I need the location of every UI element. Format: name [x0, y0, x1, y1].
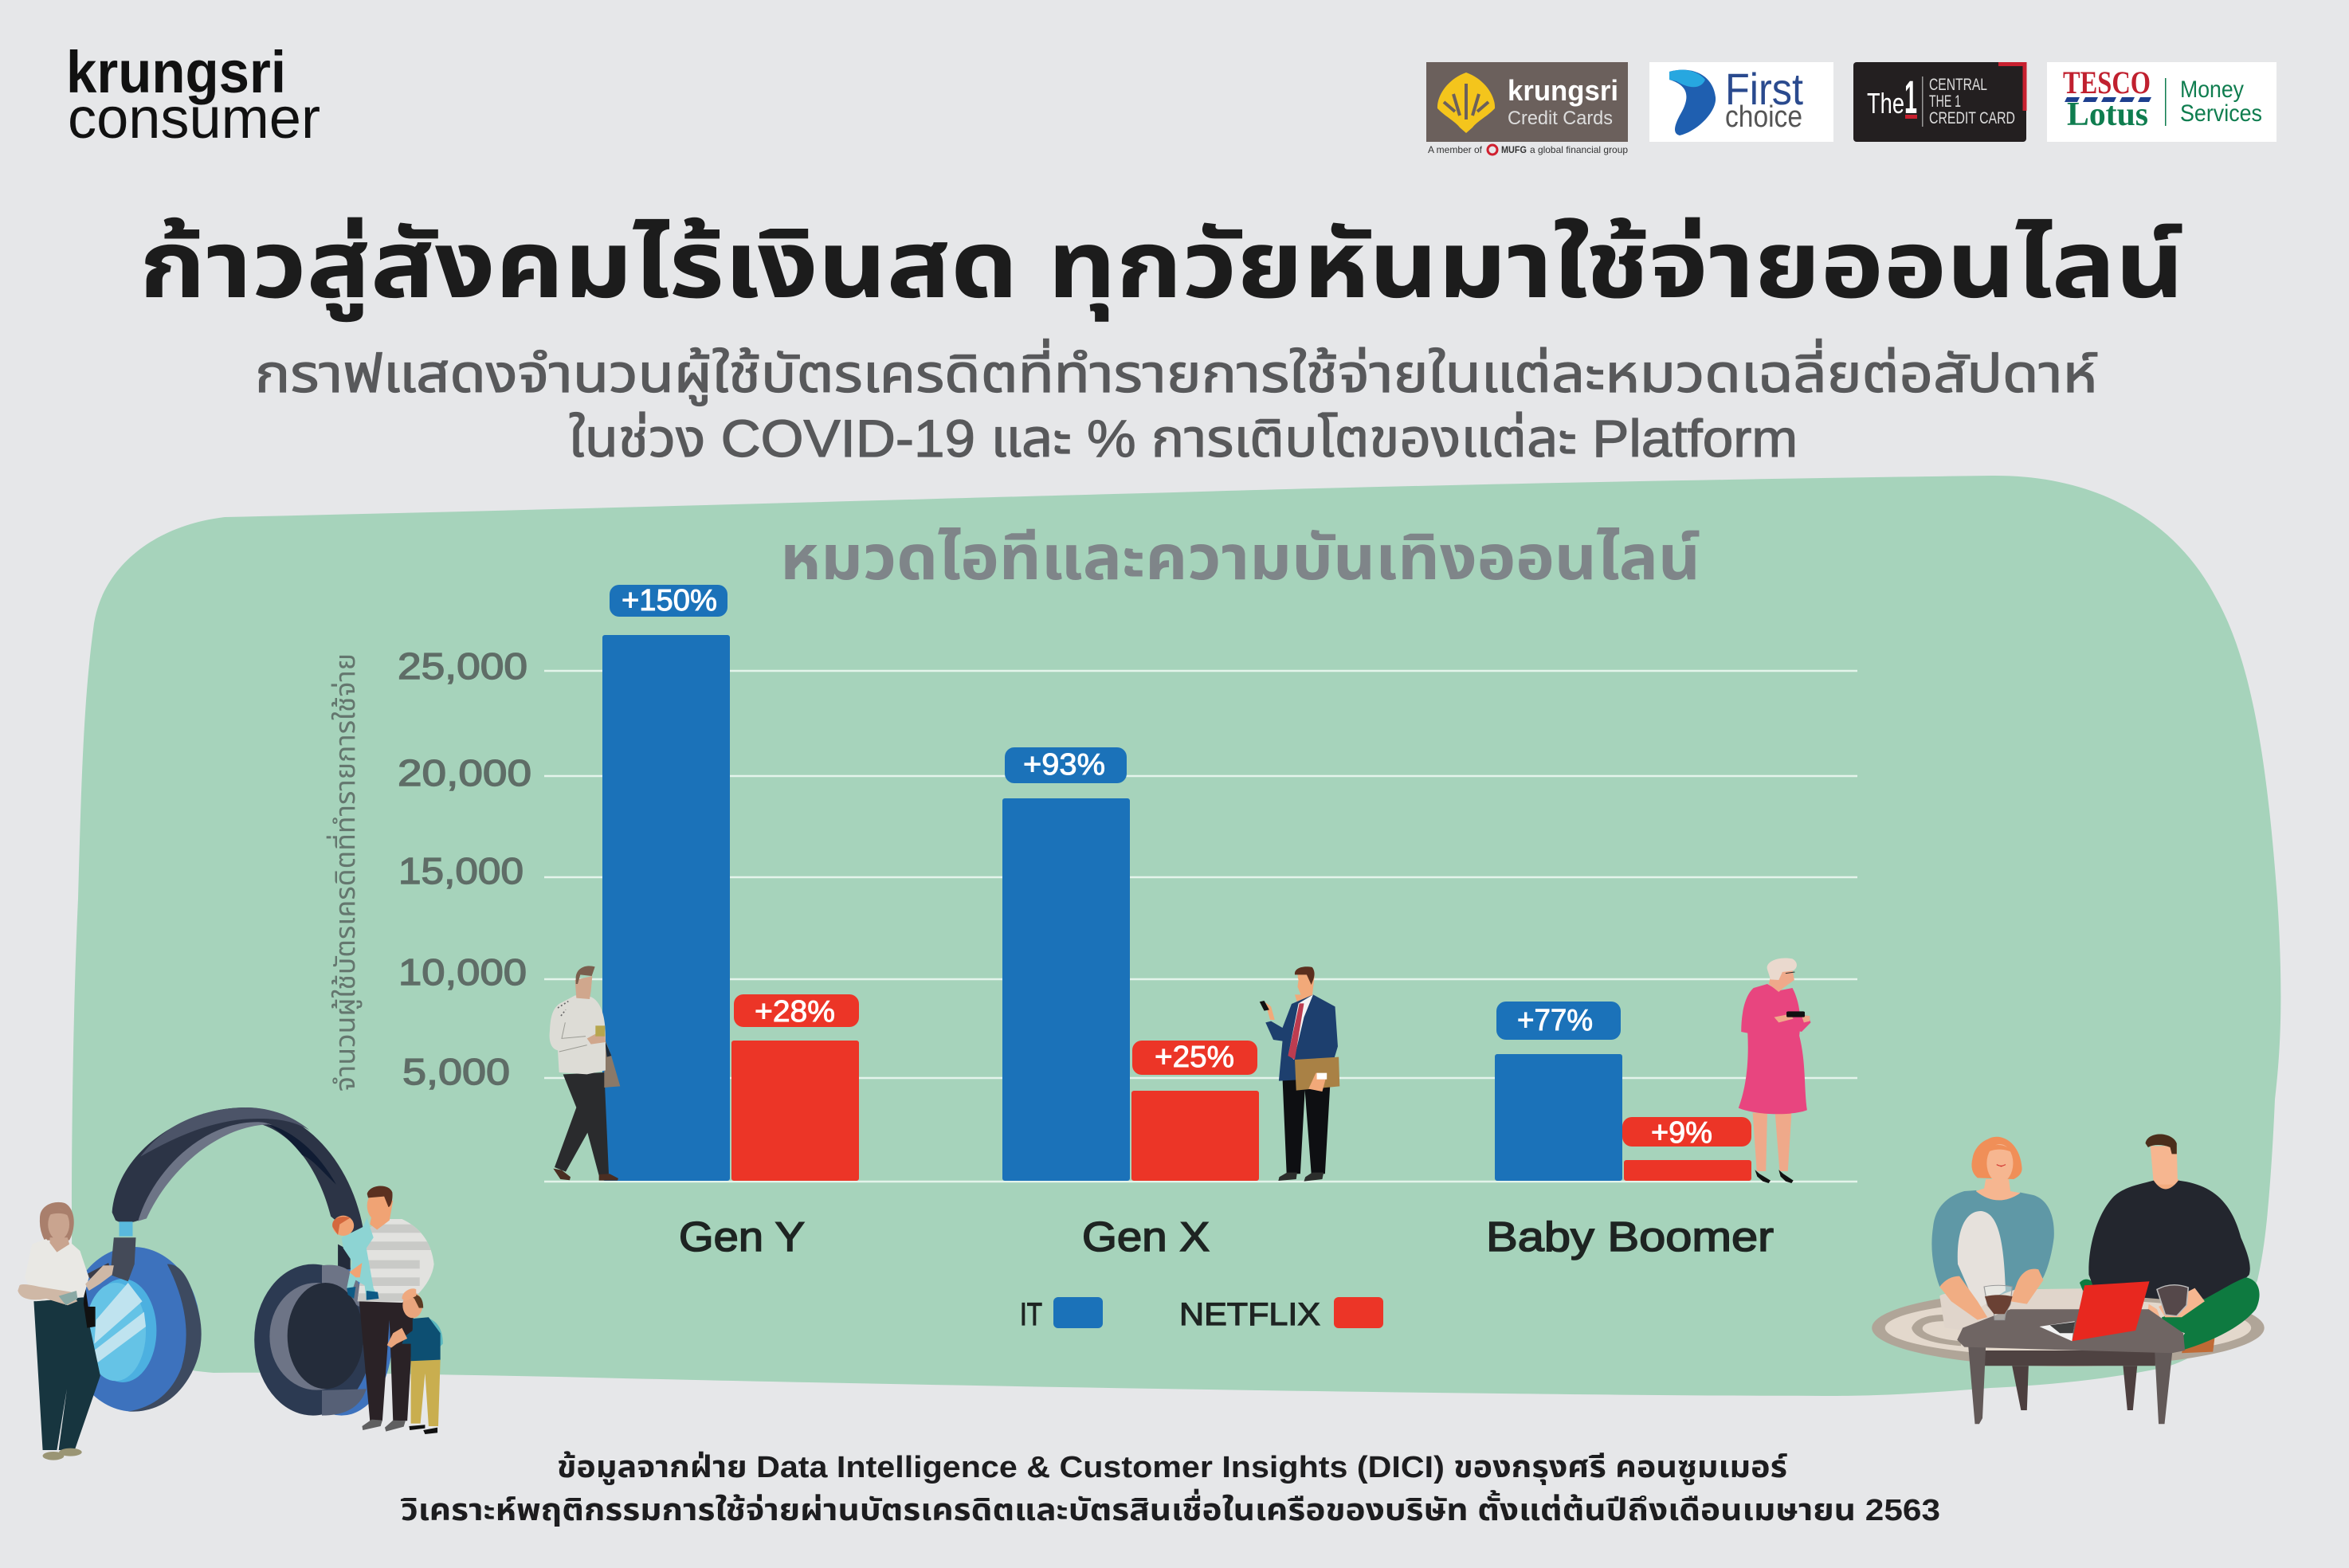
laptop — [2039, 1281, 2149, 1341]
text: MUFG member line: MUFG — [1501, 144, 1527, 155]
group: Gen X: +25% — [1155, 1041, 1234, 1074]
x axis category labels: Gen X — [1082, 1214, 1210, 1260]
logo: Tesco Lotus Money Services: Lotus — [2067, 96, 2148, 133]
illustration: man with coffee (Gen Y) — [550, 966, 620, 1181]
group: Gen Y: +150% — [622, 584, 717, 617]
illustration: giant headphones with people — [18, 1107, 443, 1460]
icon: headphones — [66, 1107, 392, 1416]
logo: Tesco Lotus Money Services: Money — [2180, 76, 2244, 103]
logo: krungsri credit cards: krungsri — [1508, 74, 1618, 107]
icon: krungsri emblem — [1437, 73, 1495, 133]
logo: Tesco Lotus Money Services: TESCO — [2063, 65, 2151, 100]
y axis tick labels: 5,000 — [402, 1051, 510, 1092]
table — [1957, 1309, 2185, 1424]
logo: Tesco Lotus Money Services — [2047, 62, 2276, 142]
legend — [1020, 1297, 1383, 1332]
footer source text: ข้อมูลจากฝ่าย Data Intelligence & Customer Insights (DICI) ของกรุงศรี คอนซูมเมอร์ — [557, 1451, 1787, 1485]
y axis tick labels: 10,000 — [398, 951, 527, 993]
group: Gen Y: +28% — [755, 995, 835, 1029]
panel: green blob background — [72, 476, 2280, 1396]
subtitle: กราฟแสดงจำนวนผู้ใช้บัตรเครดิตที่ทำรายการใช้จ่ายในแต่ละหมวดเฉลี่ยต่อสัปดาห์ — [255, 339, 2098, 406]
logo: The 1 credit card: CREDIT CARD — [1929, 109, 2015, 127]
y axis tick labels: 15,000 — [398, 850, 524, 892]
person: father with baby and boy — [332, 1186, 443, 1434]
chart heading: หมวดไอทีและความบันเทิงออนไลน์ — [780, 523, 1700, 593]
logo: The 1 credit card: 1 — [1904, 72, 1917, 123]
subtitle — [255, 339, 2098, 468]
logo: Tesco Lotus Money Services: Services — [2180, 100, 2262, 127]
y axis tick labels: 25,000 — [398, 645, 527, 687]
person: man in dark sweater — [2080, 1134, 2260, 1353]
logo: krungsri consumer: krungsri — [66, 39, 286, 105]
logo: The 1 credit card: The — [1867, 87, 1904, 120]
group: Baby Boomer: +9% — [1651, 1116, 1712, 1150]
logo: The 1 credit card: CENTRAL — [1929, 76, 1987, 94]
footer source text — [400, 1451, 1940, 1527]
x axis category labels — [679, 1214, 1774, 1260]
group: Gen X — [1002, 747, 1259, 1181]
group: Gen X: +93% — [1023, 748, 1105, 782]
group: Gen Y — [602, 584, 859, 1181]
logo: krungsri consumer — [66, 39, 320, 151]
group: Baby Boomer: +77% — [1517, 1004, 1593, 1037]
illustration: couple at table with laptop — [1872, 1134, 2265, 1424]
legend: NETFLIX — [1179, 1297, 1320, 1332]
x axis category labels: Baby Boomer — [1486, 1214, 1774, 1260]
title: ก้าวสู่สังคมไร้เงินสด ทุกวัยหันมาใช้จ่ายออนไลน์ — [139, 213, 2184, 322]
rug — [1872, 1289, 2265, 1366]
bar chart — [326, 584, 1857, 1332]
text: MUFG member line: A member of — [1428, 144, 1483, 155]
logo: The 1 credit card — [1853, 62, 2026, 142]
logo: First choice: First — [1725, 64, 1803, 114]
logo: krungsri credit cards: Credit Cards — [1508, 108, 1613, 129]
illustration: older woman in pink dress (Baby Boomer) — [1739, 958, 1810, 1183]
person: woman in teal sweater — [1931, 1137, 2083, 1333]
logo: krungsri credit cards — [1426, 62, 1628, 142]
illustration: businessman with phone (Gen X) — [1260, 966, 1339, 1182]
group: Baby Boomer — [1495, 1002, 1751, 1181]
logo: First choice: choice — [1725, 100, 1802, 134]
y axis tick labels — [398, 645, 531, 1092]
logo: krungsri consumer: consumer — [68, 87, 320, 151]
y axis title: จำนวนผู้ใช้บัตรเครดิตที่ทำรายการใช้จ่าย — [326, 653, 362, 1092]
legend: IT — [1020, 1297, 1042, 1332]
y axis tick labels: 20,000 — [398, 752, 531, 794]
text: MUFG member line: a global financial group — [1530, 144, 1628, 155]
subtitle: ในช่วง COVID-19 และ % การเติบโตของแต่ละ Platform — [569, 409, 1798, 468]
icon: glass of coffee — [1984, 1285, 2013, 1320]
logo: First choice — [1649, 62, 1833, 142]
text: MUFG member line — [1428, 144, 1628, 155]
logo: The 1 credit card: THE 1 — [1929, 92, 1961, 111]
footer source text: วิเคราะห์พฤติกรรมการใช้จ่ายผ่านบัตรเครดิตและบัตรสินเชื่อในเครือของบริษัท ตั้งแต่ต้นปีถึงเดือนเมษายน 2563 — [400, 1488, 1940, 1527]
person: woman with tablet — [18, 1202, 114, 1460]
x axis category labels: Gen Y — [679, 1214, 805, 1260]
